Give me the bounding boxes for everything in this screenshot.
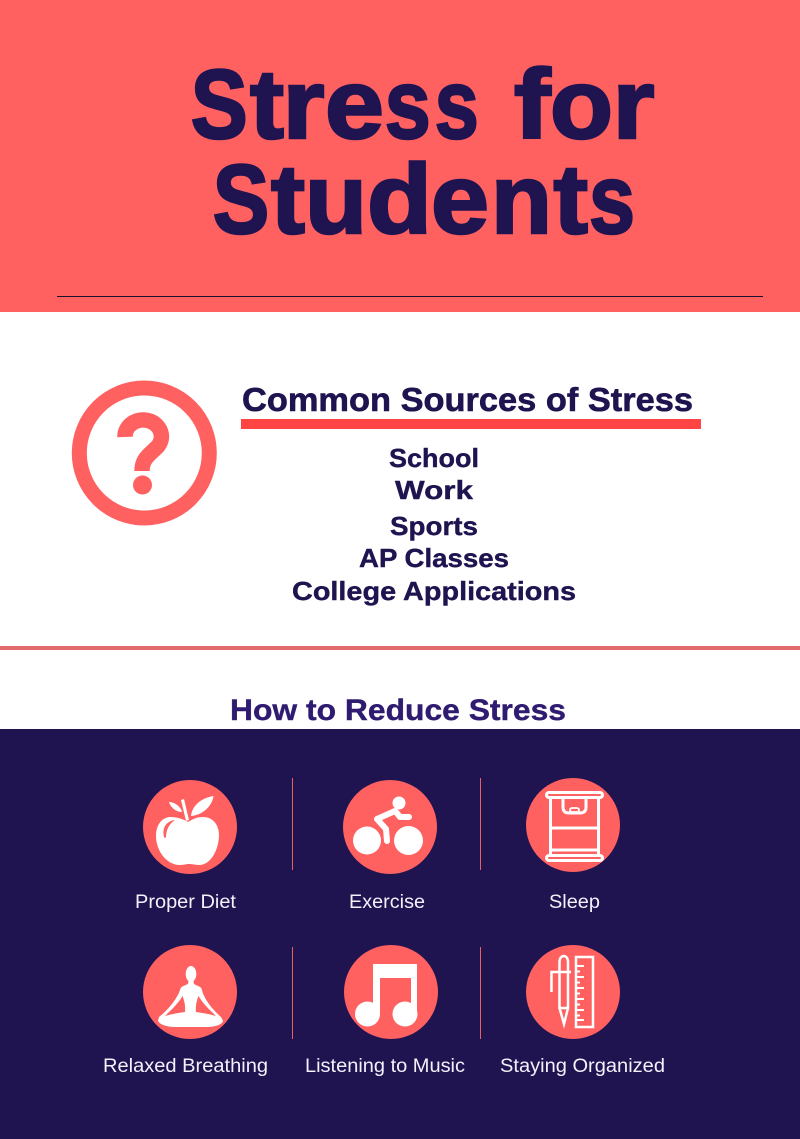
- panel: ways to reduce stress: [0, 729, 800, 1139]
- panel: header: [0, 0, 800, 312]
- label: Proper Diet: [135, 892, 237, 913]
- title: r: [612, 49, 654, 159]
- list of stress sources: School: [389, 443, 479, 473]
- heading underline: [241, 419, 701, 429]
- list of stress sources: [292, 443, 576, 606]
- title: o: [550, 49, 613, 159]
- title: e: [431, 144, 489, 254]
- title: S: [191, 49, 248, 159]
- icon: bed: [546, 792, 602, 860]
- title: t: [271, 144, 305, 254]
- title: r: [282, 49, 324, 159]
- title: n: [491, 144, 552, 254]
- label: Sleep: [549, 892, 600, 913]
- title: [191, 49, 654, 254]
- list of stress sources: Sports: [390, 511, 478, 541]
- title: s: [385, 49, 431, 159]
- item: listening to music: [305, 945, 465, 1077]
- title: e: [325, 49, 384, 159]
- item: exercise: [343, 780, 437, 913]
- list of stress sources: College Applications: [292, 576, 576, 606]
- label: Listening to Music: [305, 1056, 465, 1077]
- item: staying organized: [500, 945, 665, 1077]
- icon: question mark: [79, 388, 209, 518]
- label: Relaxed Breathing: [103, 1056, 268, 1077]
- title: t: [250, 49, 284, 159]
- item: relaxed breathing: [103, 945, 268, 1077]
- title: s: [589, 144, 635, 254]
- heading: common sources of stress: Common Sources of Stress: [242, 381, 693, 418]
- item: sleep: [526, 778, 620, 913]
- icon: cyclist: [353, 796, 423, 855]
- icon: apple: [156, 796, 219, 865]
- title: d: [367, 144, 432, 254]
- title: f: [514, 49, 551, 159]
- title: s: [435, 49, 479, 159]
- panel: common sources of stress: [0, 381, 800, 650]
- heading: how to reduce stress: How to Reduce Stress: [230, 694, 566, 727]
- item: proper diet: [135, 780, 237, 913]
- list of stress sources: AP Classes: [359, 543, 509, 573]
- label: Staying Organized: [500, 1056, 665, 1077]
- title: S: [213, 144, 269, 254]
- title: u: [305, 144, 367, 254]
- icon: pen and ruler: [552, 956, 593, 1027]
- icon: meditating figure: [158, 966, 223, 1027]
- title: t: [554, 144, 588, 254]
- label: Exercise: [349, 892, 425, 913]
- list of stress sources: Work: [395, 475, 474, 505]
- icon: music notes: [355, 964, 418, 1026]
